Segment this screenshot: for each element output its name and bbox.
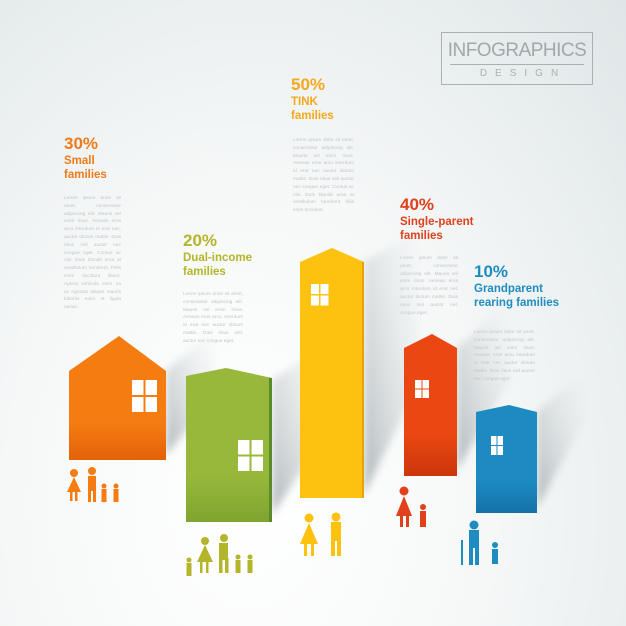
text: 20% dual-income: families xyxy=(183,266,226,278)
icon: couple yellow xyxy=(300,512,341,556)
text: 20% dual-income: 20% xyxy=(183,231,217,250)
lorem 2: Lorem ipsum dolor sit amet, consectetur adipiscing elit. Mauris vel enim risus. Aenean eros arcu, interdum id erat nec auctor dictum mattis. Duis risus nisl, auctor nec congue eget. xyxy=(183,292,243,344)
text: 40% single-parent: families xyxy=(400,230,443,242)
icon: grandparent blue xyxy=(461,520,498,565)
text: 30% small families: Small xyxy=(64,155,95,167)
icon: family green xyxy=(186,534,252,576)
text: 50% TINK: 50% xyxy=(291,75,325,94)
house: blue xyxy=(476,405,537,513)
text: 30% small families: 30% xyxy=(64,134,98,153)
text: 50% TINK: families xyxy=(291,110,334,122)
text: 10% grandparent: rearing families xyxy=(474,297,559,309)
house: yellow xyxy=(300,248,364,498)
subtitle: DESIGN xyxy=(480,68,566,79)
lorem 1: Lorem ipsum dolor sit amet, consectetur adipiscing elit. Mauris vel enim risus. Aenean eros arcu interdum id erat nec, auctor dictum mattis. Duis risus nisl auctor nec congue eget. Cursus ac nisi. Duis blandit urna at vestibulum hendrerit. Felis enim tincidunt libero. Aptent vehicula enim ria ac egestas aliquet mauris lobortis enim ut ligula varius. xyxy=(64,196,121,310)
title text: INFOGRAPHICS xyxy=(448,40,586,61)
text: 30% small families xyxy=(64,134,107,181)
text: 50% TINK: TINK xyxy=(291,96,318,108)
icon: family orange xyxy=(67,467,118,502)
house: green xyxy=(186,368,272,522)
text: 20% dual-income xyxy=(183,231,252,278)
icon: single parent red xyxy=(396,486,426,527)
lorem 4: Lorem ipsum dolor sit amet, consectetur adipiscing elit. Mauris vel enim risus. Aenean eros arcu interdum id erat nec auctor dictum mattis. Duis risus nisl auctor nec congue eget. xyxy=(400,256,458,316)
text: 40% single-parent xyxy=(400,195,474,242)
text: 50% TINK xyxy=(291,75,334,122)
text: 40% single-parent: 40% xyxy=(400,195,434,214)
text: 10% grandparent xyxy=(474,262,559,309)
text: 20% dual-income: Dual-income xyxy=(183,252,252,264)
title box xyxy=(441,32,593,85)
text: 30% small families: families xyxy=(64,169,107,181)
text: 40% single-parent: Single-parent xyxy=(400,216,473,228)
house: red xyxy=(404,334,457,476)
shadows xyxy=(166,230,585,515)
text: 10% grandparent: 10% xyxy=(474,262,508,281)
house: orange xyxy=(69,336,166,460)
lorem 5: Lorem ipsum dolor sit amet, consectetur adipiscing elit. Mauris vel enim risus. Aenean eros arcu interdum id erat nec auctor dictum mattis. Duis risus nisl auctor nec congue eget. xyxy=(474,330,535,382)
text: 10% grandparent: Grandparent xyxy=(474,283,543,295)
lorem 3: Lorem ipsum dolor sit amet, consectetur adipiscing elit. Mauris vel enim risus. Aenean eros arcu interdum id erat nec auctor dictum mattis. Duis risus nisl auctor nec congue eget. Cursus ac nisi. Duis blandit urna at vestibulum hendrerit felis enim tincidunt. xyxy=(293,138,354,213)
